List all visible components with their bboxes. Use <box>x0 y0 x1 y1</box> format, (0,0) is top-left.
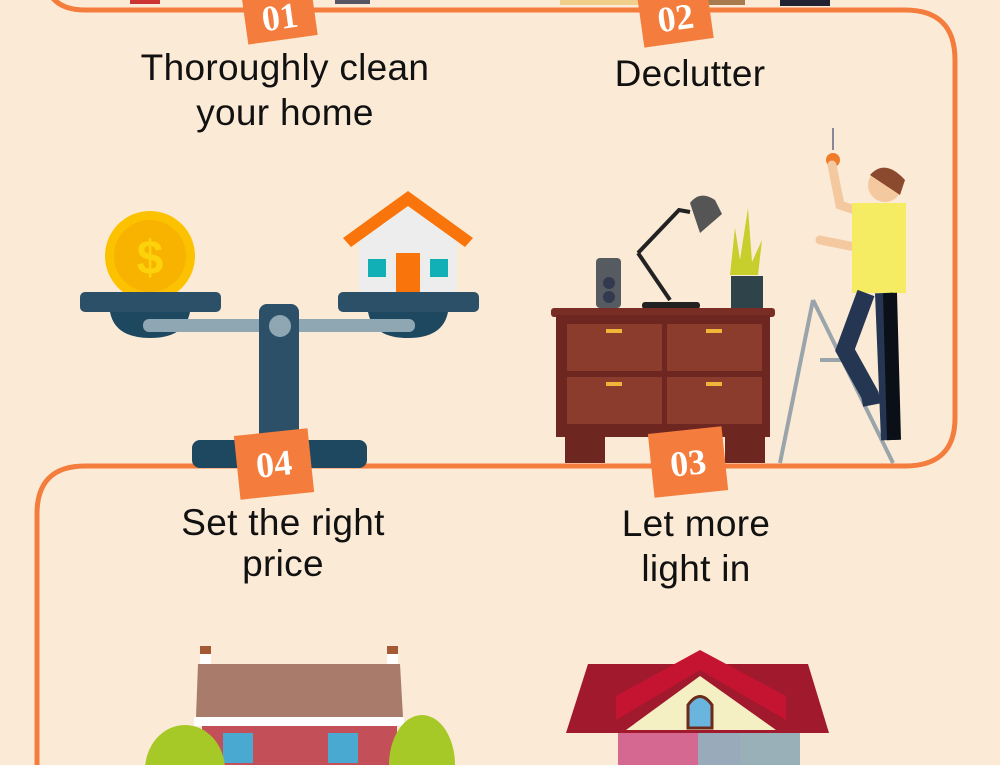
house left <box>145 646 455 765</box>
text: step 1 <box>141 47 429 133</box>
badge 01 <box>240 0 318 45</box>
text: step 1: Thoroughly clean <box>141 47 429 88</box>
text: step 4 <box>181 502 385 584</box>
badge 02 <box>636 0 714 48</box>
badge 03 <box>648 426 728 498</box>
text: step 1: your home <box>196 92 374 133</box>
badge 04 <box>234 428 314 500</box>
badge 03: 03 <box>668 441 708 485</box>
text: step 3: Let more <box>622 503 770 544</box>
text: step 3: light in <box>641 548 751 589</box>
text: step 4: price <box>242 543 324 584</box>
text: step 3 <box>622 503 770 589</box>
top cropped icons <box>130 0 830 6</box>
dresser with lamp and man <box>551 128 906 463</box>
badge 04: 04 <box>254 442 294 486</box>
text: step 4: Set the right <box>181 502 385 543</box>
scale illustration <box>80 191 479 468</box>
house right <box>566 650 829 765</box>
scale illustration: $ <box>137 232 164 285</box>
text: step 2: Declutter <box>615 53 765 94</box>
